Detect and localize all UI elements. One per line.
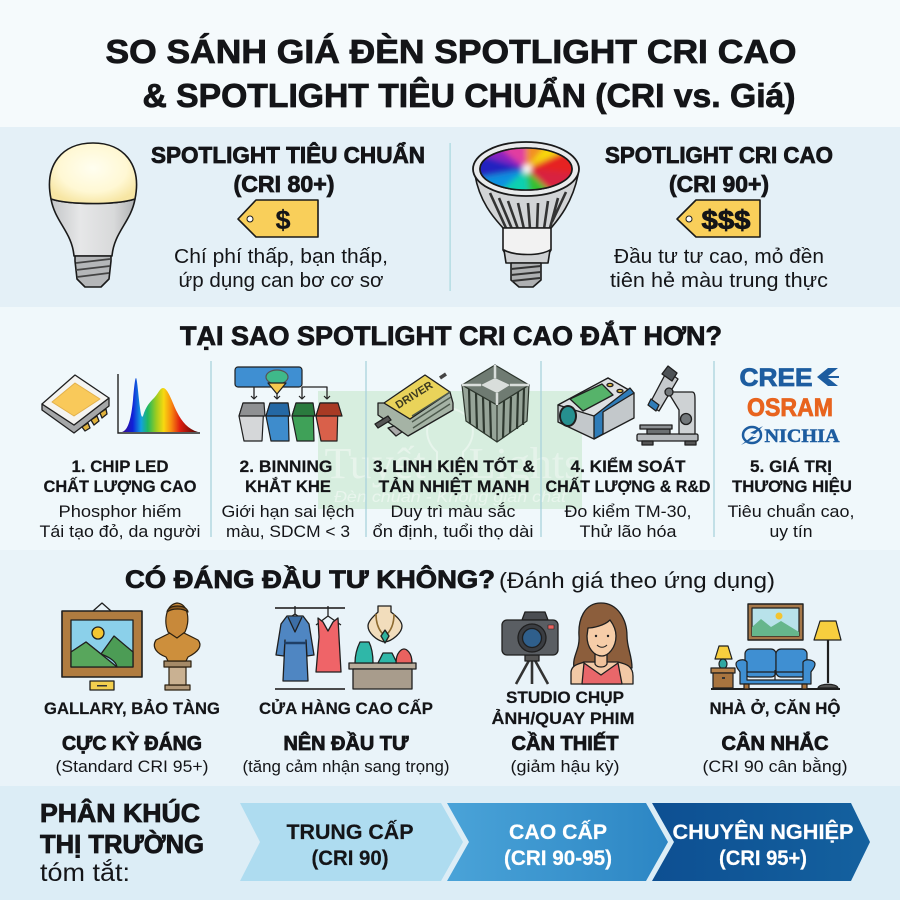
text: binning: màu, SDCM < 3 bbox=[226, 522, 350, 541]
arrow: professional segment: CHUYÊN NGHIỆP bbox=[672, 820, 854, 844]
icon: living room bbox=[711, 604, 841, 689]
title: & SPOTLIGHT TIÊU CHUẨN (CRI vs. Giá) bbox=[142, 77, 796, 114]
icon: portrait woman bbox=[571, 603, 633, 684]
divider bbox=[450, 143, 451, 291]
panel: comparison background bbox=[0, 127, 900, 307]
column 1: LED chip bbox=[40, 374, 200, 541]
watermark: Lights bbox=[469, 439, 581, 488]
icon: standard bulb bbox=[49, 143, 137, 287]
text: studio bbox=[492, 688, 634, 776]
arrow: premium segment bbox=[447, 803, 668, 881]
text: brand value: THƯƠNG HIỆU bbox=[732, 477, 852, 496]
column 4: quality control bbox=[546, 366, 710, 541]
icon: LED driver bbox=[375, 374, 453, 436]
text: quality control: Thử lão hóa bbox=[580, 522, 677, 541]
text: quality control bbox=[546, 457, 710, 541]
icon: binning diagram bbox=[235, 367, 342, 441]
text: high CRI spotlight: tiên hẻ màu trung thực bbox=[610, 270, 828, 292]
text: studio: ẢNH/QUAY PHIM bbox=[492, 709, 634, 728]
heading: market segments: PHÂN KHÚC bbox=[40, 798, 200, 828]
text: binning: KHẮT KHE bbox=[245, 477, 331, 496]
column dividers bbox=[211, 361, 714, 537]
text: studio: STUDIO CHỤP bbox=[506, 688, 624, 707]
icon: clothing rack bbox=[275, 606, 345, 689]
icon: LED chip bbox=[42, 375, 109, 433]
text: quality control: 4. KIỂM SOÁT bbox=[570, 457, 686, 476]
text: high CRI spotlight: SPOTLIGHT CRI CAO bbox=[605, 142, 833, 168]
text: driver and heat sink: 3. LINH KIỆN TỐT & bbox=[373, 456, 535, 476]
arrow: mid segment: (CRI 90) bbox=[312, 847, 388, 870]
text: binning: 2. BINNING bbox=[240, 457, 332, 476]
text: quality control: CHẤT LƯỢNG & R&D bbox=[546, 477, 710, 496]
text: driver and heat sink: ổn định, tuổi thọ dài bbox=[372, 522, 534, 541]
watermark: Đèn chuẩn - Không gian chất bbox=[334, 488, 567, 506]
application: home bbox=[702, 604, 848, 776]
icon: jewellery display bbox=[349, 606, 416, 689]
column 3: driver and heat sink bbox=[372, 365, 535, 541]
text: brand value bbox=[728, 457, 854, 541]
panel: worth investing background bbox=[0, 550, 900, 786]
text: luxury store: CỬA HÀNG CAO CẤP bbox=[259, 699, 433, 718]
arrow: mid segment bbox=[240, 803, 463, 881]
icon: LED driver: DRIVER bbox=[394, 379, 435, 412]
text: chip LED: 1. CHIP LED bbox=[72, 457, 168, 476]
text: gallery: (Standard CRI 95+) bbox=[56, 757, 208, 776]
text: chip LED: Tái tạo đỏ, da người bbox=[40, 522, 200, 541]
text: home bbox=[702, 699, 848, 776]
text: standard spotlight bbox=[151, 141, 425, 292]
icon: test instrument bbox=[558, 378, 634, 439]
title bbox=[106, 33, 796, 114]
text: studio: CẦN THIẾT bbox=[512, 732, 618, 755]
text: standard spotlight: Chí phí thấp, bạn thấp, bbox=[174, 246, 388, 268]
text: standard spotlight: ứp dụng can bơ cơ sơ bbox=[178, 270, 384, 292]
text: luxury store bbox=[242, 699, 450, 776]
text: home: (CRI 90 cân bằng) bbox=[702, 757, 848, 776]
arrow: premium segment: (CRI 90-95) bbox=[504, 847, 612, 870]
arrow: mid segment: TRUNG CẤP bbox=[286, 821, 414, 844]
column 2: binning bbox=[222, 367, 354, 541]
watermark: Tuyết bbox=[324, 439, 426, 488]
text: driver and heat sink bbox=[372, 456, 535, 541]
heading: why expensive: TẠI SAO SPOTLIGHT CRI CAO ĐẮT HƠN? bbox=[180, 320, 722, 351]
text: standard spotlight: SPOTLIGHT TIÊU CHUẨN bbox=[151, 141, 425, 168]
icon: classical bust bbox=[154, 603, 200, 690]
text: standard spotlight: (CRI 80+) bbox=[234, 171, 334, 197]
application: luxury store bbox=[242, 606, 450, 776]
icon: price tag triple: $$$ bbox=[702, 205, 750, 235]
column 5: brand value bbox=[728, 364, 854, 541]
text: gallery: GALLARY, BẢO TÀNG bbox=[44, 699, 220, 718]
icon: high CRI spotlight bbox=[472, 141, 580, 288]
logo: NICHIA: NICHIA bbox=[764, 426, 840, 447]
text: quality control: Đo kiểm TM-30, bbox=[564, 502, 692, 521]
text: studio: (giảm hậu kỳ) bbox=[510, 757, 620, 776]
panel: market segments background bbox=[0, 786, 900, 900]
text: driver and heat sink: TẢN NHIỆT MẠNH bbox=[378, 477, 530, 496]
chart: light spectrum bbox=[118, 374, 200, 433]
text: luxury store: (tăng cảm nhận sang trọng) bbox=[242, 757, 450, 776]
title: SO SÁNH GIÁ ĐÈN SPOTLIGHT CRI CAO bbox=[106, 33, 796, 70]
text: high CRI spotlight: Đầu tư tư cao, mỏ đền bbox=[614, 246, 824, 268]
text: gallery: CỰC KỲ ĐÁNG bbox=[62, 731, 202, 755]
arrow: premium segment: CAO CẤP bbox=[509, 821, 607, 844]
text: chip LED: Phosphor hiếm bbox=[58, 502, 182, 521]
text: driver and heat sink: Duy trì màu sắc bbox=[390, 502, 516, 521]
arrow: professional segment bbox=[652, 803, 870, 881]
icon: framed painting bbox=[62, 603, 142, 690]
heading: market segments bbox=[40, 798, 204, 887]
logo: CREE: CREE bbox=[740, 364, 812, 392]
text: brand value: Tiêu chuẩn cao, bbox=[728, 502, 854, 521]
text: binning bbox=[222, 457, 354, 541]
text: high CRI spotlight bbox=[605, 142, 833, 292]
icon: price tag single bbox=[238, 200, 318, 237]
text: brand value: uy tín bbox=[770, 522, 812, 541]
text: binning: Giới hạn sai lệch bbox=[222, 502, 354, 521]
icon: price tag triple bbox=[677, 200, 760, 237]
text: brand value: 5. GIÁ TRỊ bbox=[750, 457, 832, 476]
text: chip LED bbox=[40, 457, 200, 541]
icon: price tag single: $ bbox=[275, 205, 291, 235]
text: gallery bbox=[44, 699, 220, 776]
arrow: professional segment: (CRI 95+) bbox=[719, 847, 807, 870]
text: luxury store: NÊN ĐẦU TƯ bbox=[284, 731, 409, 755]
application: gallery bbox=[44, 603, 220, 776]
text: home: NHÀ Ở, CĂN HỘ bbox=[710, 699, 840, 718]
icon: microscope bbox=[637, 366, 698, 445]
heading: market segments: tóm tắt: bbox=[40, 858, 130, 887]
heading: market segments: THỊ TRƯỜNG bbox=[40, 829, 204, 859]
heading: worth investing bbox=[125, 564, 775, 594]
heading: worth investing: (Đánh giá theo ứng dụng) bbox=[499, 568, 775, 593]
icon: heat sink bbox=[462, 365, 529, 442]
panel: why expensive background bbox=[0, 307, 900, 550]
application: studio bbox=[492, 603, 634, 776]
icon: camera on tripod bbox=[502, 612, 558, 684]
heading: worth investing: CÓ ĐÁNG ĐẦU TƯ KHÔNG? bbox=[125, 564, 495, 594]
logo: OSRAM: OSRAM bbox=[747, 394, 833, 422]
logo: CREE bbox=[740, 364, 839, 392]
text: high CRI spotlight: (CRI 90+) bbox=[669, 171, 769, 197]
text: chip LED: CHẤT LƯỢNG CAO bbox=[44, 477, 196, 496]
watermark bbox=[318, 391, 582, 509]
text: home: CÂN NHẮC bbox=[722, 731, 828, 755]
